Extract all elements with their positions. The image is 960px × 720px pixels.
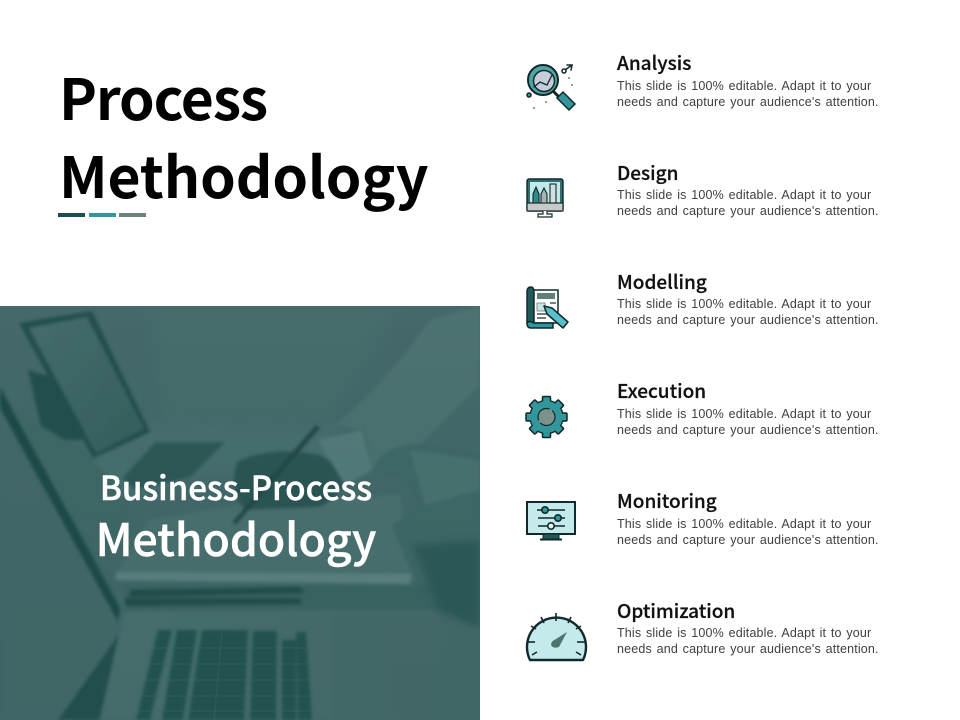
item: optimization: This slide is 100% editable. Adapt it to your [617, 626, 871, 640]
item: modelling: This slide is 100% editable. Adapt it to your [617, 297, 871, 311]
pen [232, 425, 320, 525]
right hand [372, 444, 480, 625]
icon: monitoring screen with sliders [526, 501, 576, 540]
item: analysis [616, 49, 879, 109]
icon: analysis magnifier [526, 64, 576, 111]
title: Methodology [59, 133, 428, 215]
icon: modelling document and pencil [526, 286, 569, 329]
front keyboard [136, 630, 312, 720]
item: analysis: Analysis [617, 49, 691, 76]
icon: design monitor [526, 178, 564, 218]
item: optimization: needs and capture your audience's attention. [617, 642, 879, 656]
rear laptop base [93, 436, 232, 500]
title accent bars [58, 213, 146, 217]
item: execution: needs and capture your audience's attention. [617, 423, 879, 437]
item: analysis: This slide is 100% editable. Adapt it to your [617, 79, 871, 93]
item: design: This slide is 100% editable. Adapt it to your [617, 188, 871, 202]
panel: photo with teal overlay [0, 306, 480, 720]
panel heading: Business-Process [100, 462, 372, 510]
item: execution: Execution [617, 377, 706, 404]
dark shadow under right hand [412, 540, 480, 628]
front laptop lid back [0, 415, 118, 720]
front laptop base [100, 610, 480, 720]
rear laptop stand [28, 370, 88, 440]
photo scene: laptops and hands [0, 309, 480, 720]
title [59, 55, 428, 215]
hand writing [234, 451, 345, 510]
desk strip behind keyboard [0, 400, 130, 540]
item: optimization [617, 597, 879, 656]
rear laptop lid [19, 311, 150, 458]
item: modelling: needs and capture your audience's attention. [617, 313, 879, 327]
sleeve and cuff [318, 430, 372, 485]
title: Process [59, 55, 267, 137]
item: monitoring: needs and capture your audience's attention. [617, 533, 879, 547]
item: monitoring: Monitoring [617, 487, 717, 514]
front laptop lid edge [0, 387, 120, 622]
item: design: needs and capture your audience's attention. [617, 204, 879, 218]
item: design: Design [617, 159, 678, 186]
item: analysis: needs and capture your audience's attention. [617, 95, 879, 109]
item: design [617, 159, 879, 218]
icon: optimization gauge [526, 613, 588, 662]
item: monitoring: This slide is 100% editable. Adapt it to your [617, 517, 871, 531]
panel heading [96, 462, 376, 569]
pens on desk [130, 587, 305, 597]
item: execution: This slide is 100% editable. Adapt it to your [617, 407, 871, 421]
item: modelling: Modelling [617, 268, 707, 295]
item: optimization: Optimization [617, 597, 735, 624]
item: execution [617, 377, 879, 437]
item: monitoring [617, 487, 879, 547]
paper [118, 495, 412, 575]
item: modelling [617, 268, 879, 327]
icon: execution gear [525, 396, 568, 438]
panel heading: Methodology [96, 504, 376, 569]
